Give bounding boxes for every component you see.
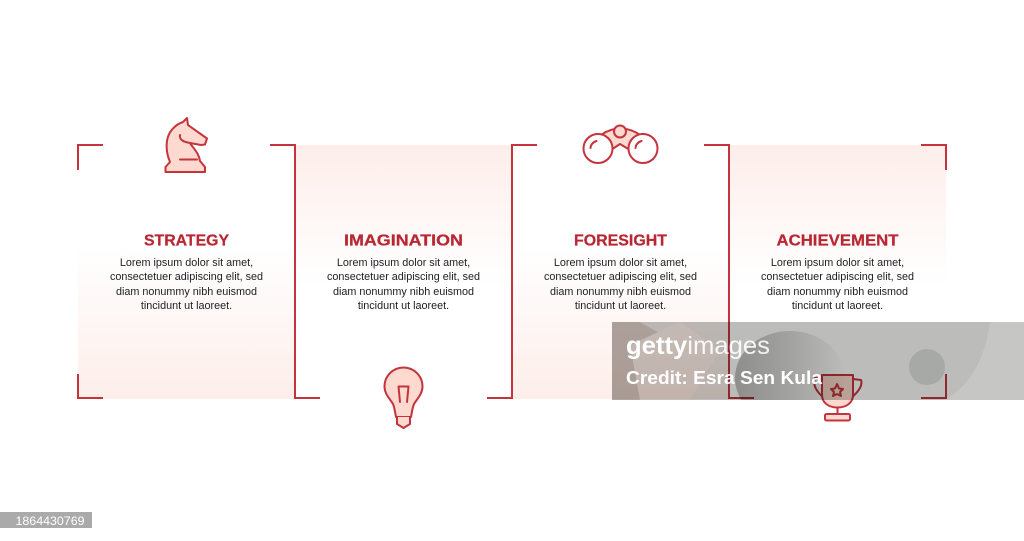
text block: foresight: diam nonummy nibh euismod bbox=[550, 286, 691, 298]
text block: foresight: consectetuer adipiscing elit, sed bbox=[544, 271, 697, 283]
text block: strategy: consectetuer adipiscing elit, sed bbox=[110, 271, 263, 283]
text block: imagination: consectetuer adipiscing elit, sed bbox=[327, 271, 480, 283]
text block: foresight: tincidunt ut laoreet. bbox=[575, 300, 666, 312]
image id tag: 1864430769 bbox=[16, 516, 84, 528]
panel: imagination bbox=[295, 145, 512, 399]
panel: achievement bbox=[729, 145, 946, 399]
text block: achievement: Lorem ipsum dolor sit amet, bbox=[771, 257, 904, 269]
text block: foresight: Lorem ipsum dolor sit amet, bbox=[554, 257, 687, 269]
frame brackets bbox=[78, 145, 946, 398]
text block: strategy: tincidunt ut laoreet. bbox=[141, 300, 232, 312]
credit line: Credit: Esra Sen Kula bbox=[626, 367, 823, 388]
icon: binoculars bbox=[584, 126, 658, 163]
text block: imagination: tincidunt ut laoreet. bbox=[358, 300, 449, 312]
heading: achievement: ACHIEVEMENT bbox=[776, 232, 899, 250]
text block: imagination: diam nonummy nibh euismod bbox=[333, 286, 474, 298]
heading: strategy: STRATEGY bbox=[144, 232, 230, 250]
panel: foresight bbox=[512, 145, 729, 399]
icon: light bulb bbox=[384, 368, 422, 428]
text block: achievement: tincidunt ut laoreet. bbox=[792, 300, 883, 312]
getty logo: gettyimages bbox=[626, 332, 770, 360]
text block: strategy: Lorem ipsum dolor sit amet, bbox=[120, 257, 253, 269]
heading: foresight: FORESIGHT bbox=[574, 232, 668, 250]
icon: trophy bbox=[814, 375, 861, 420]
watermark band bbox=[612, 322, 1024, 400]
image id tag bbox=[0, 512, 92, 528]
panel: strategy bbox=[78, 145, 295, 399]
text block: imagination: Lorem ipsum dolor sit amet, bbox=[337, 257, 470, 269]
text block: achievement: diam nonummy nibh euismod bbox=[767, 286, 908, 298]
icon: chess knight bbox=[166, 118, 207, 172]
heading: imagination: IMAGINATION bbox=[344, 232, 463, 250]
text block: achievement: consectetuer adipiscing elit, sed bbox=[761, 271, 914, 283]
text block: strategy: diam nonummy nibh euismod bbox=[116, 286, 257, 298]
